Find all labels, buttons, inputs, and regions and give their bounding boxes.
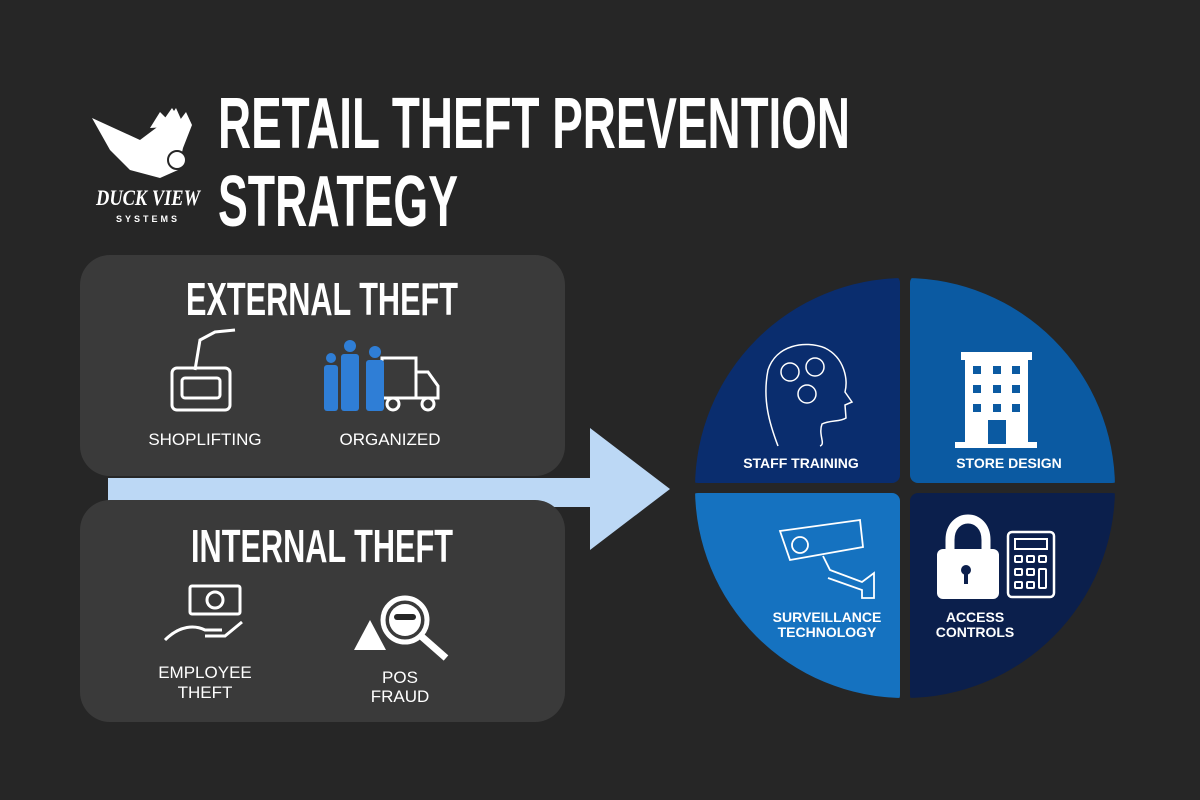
icon: head with gears <box>766 344 852 446</box>
chart: prevention quadrants <box>690 275 1120 703</box>
chart: prevention quadrants: TECHNOLOGY <box>778 624 877 640</box>
label: shoplifting: SHOPLIFTING <box>148 430 262 449</box>
icon: camera <box>780 520 874 598</box>
panel: internal theft: FRAUD <box>371 687 429 706</box>
label: store design: STORE DESIGN <box>956 455 1062 471</box>
quadrant: surveillance technology <box>690 493 900 703</box>
icon: organized <box>324 340 438 411</box>
panel: internal theft: THEFT <box>178 683 232 702</box>
label: access controls: ACCESS <box>946 609 1004 625</box>
quadrant: staff training <box>690 275 900 483</box>
label: employee theft: EMPLOYEE <box>158 663 252 682</box>
panel: external theft <box>80 255 565 476</box>
chart: prevention quadrants: CONTROLS <box>936 624 1014 640</box>
logo: Duck View Systems: SYSTEMS <box>116 214 180 224</box>
panel: internal theft <box>80 500 565 722</box>
logo: Duck View Systems: DUCK VIEW <box>95 185 201 210</box>
title <box>218 84 850 242</box>
icon: lock and keypad <box>937 519 1054 599</box>
icon: building <box>955 352 1037 448</box>
icon: pos fraud <box>354 598 446 658</box>
logo: Duck View Systems <box>92 108 201 224</box>
icon: employee theft <box>165 586 242 640</box>
quadrant: store design <box>910 275 1120 483</box>
heading: external theft: EXTERNAL THEFT <box>186 273 458 325</box>
title: STRATEGY <box>218 162 458 242</box>
arrow <box>108 428 670 550</box>
icon: shoplifting <box>172 330 235 410</box>
label: staff training: STAFF TRAINING <box>743 455 859 471</box>
heading: internal theft: INTERNAL THEFT <box>191 520 453 572</box>
title: RETAIL THEFT PREVENTION <box>218 84 850 164</box>
quadrant: access controls <box>910 493 1120 703</box>
label: pos fraud: POS <box>382 668 418 687</box>
label: surveillance technology: SURVEILLANCE <box>773 609 881 625</box>
label: organized: ORGANIZED <box>339 430 441 449</box>
